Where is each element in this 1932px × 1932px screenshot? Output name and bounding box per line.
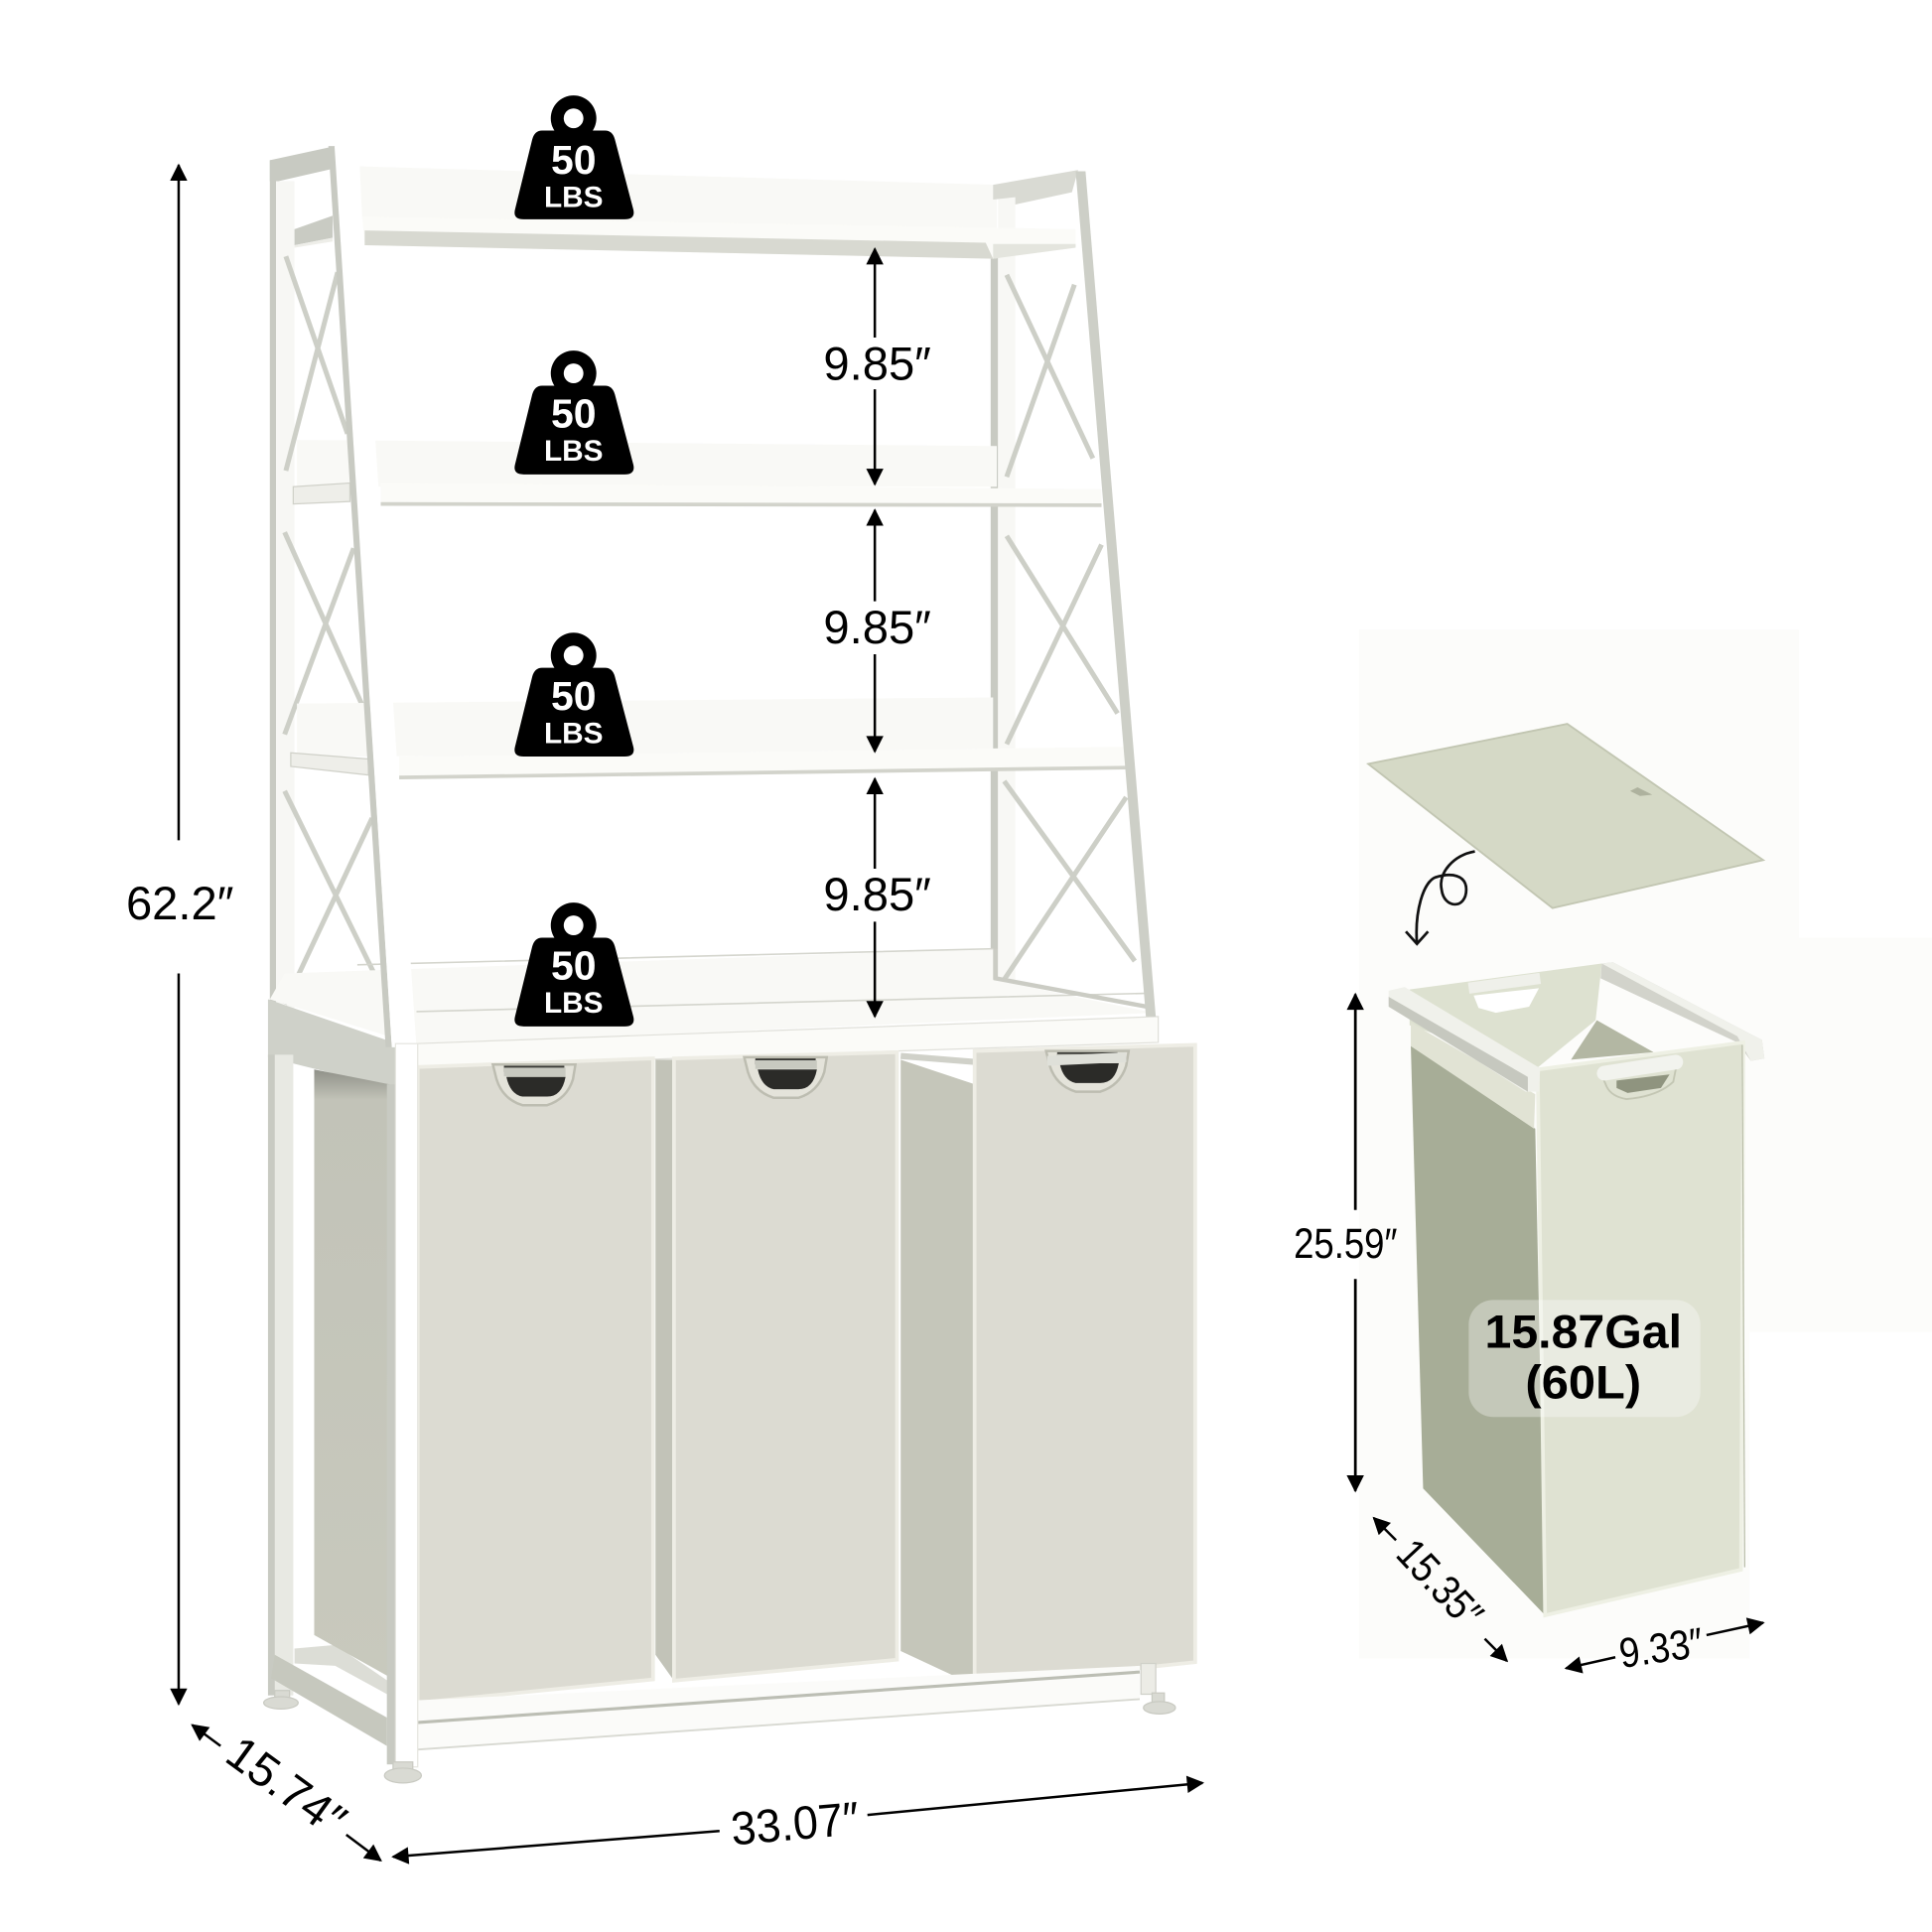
- back handle opening: [1473, 988, 1539, 1013]
- weight badge: second shelf: [514, 350, 633, 475]
- weight badge: third shelf: 50: [551, 673, 596, 719]
- right rear post: [1141, 1663, 1156, 1694]
- width dimension: [393, 1783, 1202, 1857]
- hamper interior: [1571, 1021, 1654, 1059]
- front rail: [416, 1666, 1140, 1749]
- shelf unit frame and shelves: [268, 146, 1159, 1089]
- hamper front: [1538, 1042, 1744, 1615]
- weight badge: top shelf: 50: [551, 137, 596, 183]
- width dimension: 33.07″: [729, 1791, 861, 1855]
- hamper width dimension: [1566, 1619, 1763, 1677]
- hamper depth dimension: 15.35″: [1388, 1530, 1492, 1637]
- third shelf: [291, 697, 1126, 778]
- lower side rail: [271, 1655, 387, 1746]
- hamper side: [1411, 1046, 1545, 1615]
- left rear lower post: [268, 1054, 293, 1696]
- curved arrow: [1406, 852, 1475, 944]
- top strip: [1411, 1023, 1535, 1129]
- right rear post: [991, 198, 1016, 992]
- basket 3 side: [900, 1059, 975, 1686]
- weight badge: third shelf: LBS: [544, 717, 603, 750]
- capacity callout: [1468, 1300, 1701, 1417]
- left front leg: [329, 146, 416, 1047]
- capacity callout: 15.87Gal: [1484, 1306, 1682, 1358]
- right front leg: [1075, 172, 1156, 1017]
- weight badge: base: LBS: [544, 987, 603, 1020]
- capacity callout: (60L): [1525, 1356, 1641, 1409]
- lower inner rail: [295, 1645, 389, 1696]
- left cross braces: [285, 256, 383, 1004]
- laundry hamper: [1389, 962, 1764, 1615]
- left front post: [387, 1043, 418, 1767]
- basket 1 side: [314, 1069, 389, 1677]
- top shelf: [295, 167, 1075, 259]
- back rod: [1468, 978, 1540, 988]
- weight badge: top shelf: LBS: [544, 181, 603, 213]
- inner back panel: [1410, 964, 1601, 1069]
- hamper height dimension: 25.59″: [1294, 1220, 1397, 1267]
- weight badge: second shelf: LBS: [544, 435, 603, 468]
- shelf gap dimension 2: 9.85″: [823, 601, 931, 653]
- basket 3 front: [975, 1044, 1195, 1686]
- height dimension: 62.2″: [126, 877, 233, 929]
- left rear post: [270, 160, 295, 1017]
- shelf gap dimension 3: 9.85″: [823, 868, 931, 920]
- second shelf: [293, 440, 1102, 505]
- basket 1 front: [418, 1058, 653, 1703]
- depth dimension: 15.74″: [217, 1725, 356, 1847]
- basket 2 front: [674, 1052, 897, 1681]
- base surface: [268, 949, 1159, 1089]
- weight badge: base: 50: [551, 943, 596, 989]
- hamper width dimension: 9.33″: [1616, 1619, 1706, 1677]
- laundry cabinet: [264, 1043, 1195, 1783]
- basket 2 side: [655, 1059, 674, 1681]
- right top bar: [993, 170, 1078, 205]
- right rail: [1600, 962, 1764, 1061]
- depth dimension: [193, 1725, 380, 1861]
- weight badge: top shelf: [514, 95, 633, 219]
- weight badge: third shelf: [514, 632, 633, 757]
- feet: [264, 1691, 1175, 1783]
- weight badge: base: [514, 902, 633, 1027]
- basket 3 rail: [900, 1056, 977, 1062]
- shelf gap dimension 1: 9.85″: [823, 337, 931, 389]
- hamper lid: [1368, 724, 1763, 908]
- left rail: [1389, 987, 1540, 1092]
- hamper backdrop: [1359, 629, 1932, 1658]
- right cross braces: [1004, 275, 1135, 980]
- weight badge: second shelf: 50: [551, 391, 596, 437]
- left top bar: [270, 146, 336, 181]
